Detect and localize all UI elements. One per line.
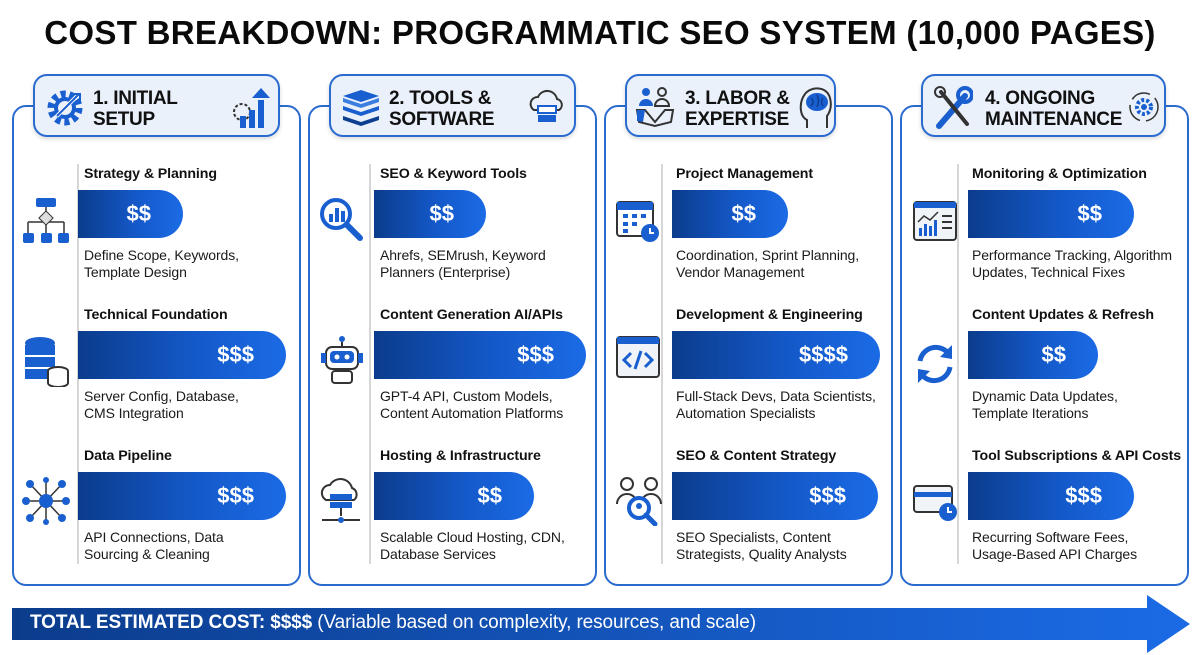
row: seo & keyword tools: Ahrefs, SEMrush, Keyword bbox=[380, 247, 546, 263]
row: project management: Vendor Management bbox=[676, 264, 804, 280]
row: monitoring: Performance Tracking, Algorithm bbox=[972, 247, 1172, 263]
icon: people search bbox=[616, 477, 662, 526]
row: monitoring bbox=[913, 166, 1172, 280]
header: 1. initial setup bbox=[33, 74, 280, 137]
icon: calendar bbox=[616, 201, 659, 242]
row: content generation bbox=[321, 307, 586, 420]
row: monitoring: $$ bbox=[1078, 201, 1102, 226]
total text: TOTAL ESTIMATED COST: $$$$ (Variable based on complexity, resources, and scale) bbox=[30, 612, 756, 633]
row: data pipeline bbox=[22, 448, 286, 562]
row: development: $$$$ bbox=[799, 342, 848, 367]
row: tool subscriptions bbox=[913, 448, 1181, 562]
row: project management bbox=[616, 166, 859, 280]
icon: network bbox=[22, 477, 70, 525]
icon: gear bbox=[48, 90, 82, 126]
row: technical foundation: CMS Integration bbox=[84, 404, 184, 420]
row: technical foundation: Server Config, Database, bbox=[84, 388, 239, 404]
row: tool subscriptions: $$$ bbox=[1065, 483, 1102, 508]
header: 3. labor & expertise bbox=[625, 74, 836, 137]
row: seo & keyword tools: $$ bbox=[430, 201, 454, 226]
row: data pipeline: $$$ bbox=[217, 483, 254, 508]
row: hosting bbox=[320, 448, 565, 562]
row: seo & content strategy bbox=[616, 448, 878, 562]
row: technical foundation bbox=[25, 307, 286, 421]
panel: tools & software bbox=[308, 105, 597, 586]
icon: flowchart bbox=[23, 198, 69, 243]
icon: dashboard bbox=[913, 201, 957, 241]
icon: robot bbox=[321, 336, 363, 384]
header: 3. labor & expertise: 3. LABOR & bbox=[685, 88, 790, 109]
row: project management: $$ bbox=[732, 201, 756, 226]
panel: ongoing maintenance bbox=[900, 105, 1189, 586]
row: tool subscriptions: Usage-Based API Charges bbox=[972, 546, 1137, 562]
row: data pipeline: Sourcing & Cleaning bbox=[84, 546, 210, 562]
row: strategy & planning: Template Design bbox=[84, 264, 187, 280]
row: technical foundation: $$$ bbox=[217, 342, 254, 367]
header: 1. initial setup: SETUP bbox=[93, 109, 155, 130]
icon: brain head bbox=[800, 87, 832, 128]
header: 4. ongoing maintenance: 4. ONGOING bbox=[985, 88, 1095, 109]
icon: cloud hosting bbox=[320, 478, 360, 523]
header: 2. tools & software bbox=[329, 74, 576, 137]
icon: stack bbox=[343, 90, 379, 126]
row: strategy & planning: Strategy & Planning bbox=[84, 166, 217, 182]
dividers bbox=[77, 164, 79, 564]
row: hosting: $$ bbox=[478, 483, 502, 508]
row: development: Automation Specialists bbox=[676, 404, 815, 420]
icon: cloud server bbox=[530, 90, 563, 122]
row: strategy & planning: Define Scope, Keywords, bbox=[84, 247, 239, 263]
row: project management: Project Management bbox=[676, 166, 813, 182]
header: 4. ongoing maintenance: MAINTENANCE bbox=[985, 109, 1122, 130]
icon: handshake bbox=[636, 87, 674, 127]
header: 2. tools & software: 2. TOOLS & bbox=[389, 88, 491, 109]
row: content generation: GPT-4 API, Custom Models, bbox=[380, 388, 553, 404]
row: data pipeline: Data Pipeline bbox=[84, 448, 172, 464]
row: project management: Coordination, Sprint Planning, bbox=[676, 247, 859, 263]
row: content updates: Content Updates & Refresh bbox=[972, 307, 1154, 323]
arrow: total estimated cost bbox=[12, 595, 1190, 653]
panel: labor & expertise bbox=[604, 105, 893, 586]
row: strategy & planning bbox=[23, 166, 239, 280]
row: seo & content strategy: SEO Specialists, Content bbox=[676, 529, 831, 545]
header: 4. ongoing maintenance bbox=[921, 74, 1166, 137]
header: 3. labor & expertise: EXPERTISE bbox=[685, 109, 789, 130]
row: content generation: $$$ bbox=[517, 342, 554, 367]
row: content updates: $$ bbox=[1042, 342, 1066, 367]
row: seo & content strategy: $$$ bbox=[809, 483, 846, 508]
icon: card clock bbox=[913, 485, 957, 521]
row: development: Development & Engineering bbox=[676, 307, 863, 323]
row: tool subscriptions: Tool Subscriptions & API Costs bbox=[972, 448, 1181, 464]
icon: refresh bbox=[918, 344, 952, 384]
title: COST BREAKDOWN: PROGRAMMATIC SEO SYSTEM (10,000 PAGES) bbox=[44, 14, 1156, 51]
row: seo & content strategy: SEO & Content Strategy bbox=[676, 448, 836, 464]
icon: magnifier chart bbox=[320, 198, 363, 241]
row: seo & content strategy: Strategists, Quality Analysts bbox=[676, 546, 847, 562]
row: hosting: Hosting & Infrastructure bbox=[380, 448, 541, 464]
row: development bbox=[616, 307, 880, 421]
row: hosting: Scalable Cloud Hosting, CDN, bbox=[380, 529, 565, 545]
icon: tools bbox=[934, 86, 973, 129]
icon: database bbox=[25, 337, 69, 387]
row: monitoring: Monitoring & Optimization bbox=[972, 166, 1147, 182]
icon: gear cycle bbox=[1129, 92, 1159, 122]
row: development: Full-Stack Devs, Data Scientists, bbox=[676, 388, 876, 404]
icon: growth chart bbox=[233, 88, 270, 128]
row: content updates: Dynamic Data Updates, bbox=[972, 388, 1118, 404]
row: content updates bbox=[918, 307, 1154, 421]
icon: code window bbox=[616, 336, 660, 378]
header: 2. tools & software: SOFTWARE bbox=[389, 109, 494, 130]
row: data pipeline: API Connections, Data bbox=[84, 529, 224, 545]
row: technical foundation: Technical Foundation bbox=[84, 307, 228, 323]
row: content updates: Template Iterations bbox=[972, 404, 1088, 420]
row: content generation: Content Generation AI/APIs bbox=[380, 307, 563, 323]
row: tool subscriptions: Recurring Software Fees, bbox=[972, 529, 1128, 545]
row: content generation: Content Automation Platforms bbox=[380, 404, 563, 420]
row: seo & keyword tools: Planners (Enterprise) bbox=[380, 264, 510, 280]
row: seo & keyword tools bbox=[320, 166, 546, 280]
header: 1. initial setup: 1. INITIAL bbox=[93, 88, 178, 109]
panel: initial setup bbox=[12, 105, 301, 586]
row: monitoring: Updates, Technical Fixes bbox=[972, 264, 1125, 280]
row: seo & keyword tools: SEO & Keyword Tools bbox=[380, 166, 527, 182]
row: strategy & planning: $$ bbox=[127, 201, 151, 226]
row: hosting: Database Services bbox=[380, 546, 496, 562]
